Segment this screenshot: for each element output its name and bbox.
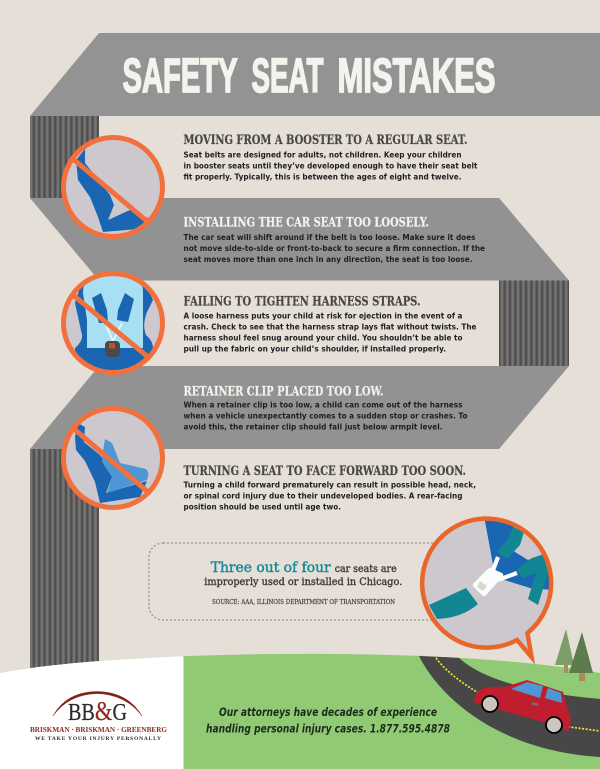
section 3 text: FAILING TO TIGHTEN HARNESS STRAPS. xyxy=(184,295,420,310)
hill: white logo area xyxy=(0,656,184,769)
logo: WE TAKE YOUR INJURY PERSONALLY xyxy=(35,736,161,742)
section 1 text xyxy=(184,133,478,182)
section 2 text: not move side-to-side or front-to-back to secure a firm connection. If the xyxy=(184,243,485,253)
tree: light xyxy=(555,629,574,673)
section 5 text: TURNING A SEAT TO FACE FORWARD TOO SOON. xyxy=(184,464,466,479)
section 2 text: INSTALLING THE CAR SEAT TOO LOOSELY. xyxy=(184,216,429,231)
striped fold: left top xyxy=(30,116,99,198)
section 2 text xyxy=(184,216,485,264)
icon: booster seat prohibited xyxy=(63,137,163,237)
statistic callout: car seats are xyxy=(335,564,397,575)
red car xyxy=(474,680,571,733)
striped fold: right xyxy=(499,280,569,366)
title: SAFETY xyxy=(122,50,238,103)
logo: BB&G xyxy=(68,696,127,726)
section 4 text: avoid this, the retainer clip should fall just below armpit level. xyxy=(184,421,442,431)
logo xyxy=(30,692,167,742)
section 3 text: A loose harness puts your child at risk for ejection in the event of a xyxy=(184,310,462,320)
hill: green xyxy=(0,654,600,769)
section 1 text: fit properly. Typically, this is between the ages of eight and twelve. xyxy=(184,172,462,182)
footer call to action xyxy=(206,705,450,736)
statistic callout: SOURCE: AAA, ILLINOIS DEPARTMENT OF TRANSPORTATION xyxy=(212,599,396,606)
band: retainer clip xyxy=(30,366,569,449)
section 5 text: or spinal cord injury due to their undeveloped bodies. A rear-facing xyxy=(184,490,463,500)
footer call to action: handling personal injury cases. 1.877.595.4878 xyxy=(206,722,450,736)
band: installing xyxy=(30,198,569,280)
road centre line xyxy=(434,655,600,731)
section 3 text: harness shoul feel snug around your child. You shouldn’t be able to xyxy=(184,332,463,342)
section 4 text: When a retainer clip is too low, a child can come out of the harness xyxy=(184,399,463,409)
car windows xyxy=(511,682,543,698)
section 3 text: crash. Check to see that the harness strap lays flat without twists. The xyxy=(184,321,477,331)
section 3 text xyxy=(184,295,477,353)
section 4 text: when a vehicle unexpectantly comes to a sudden stop or crashes. To xyxy=(184,410,468,420)
statistic callout: Three out of four xyxy=(211,560,331,576)
title banner xyxy=(30,33,600,116)
icon: forward-facing seat prohibited xyxy=(63,408,163,508)
section 5 text xyxy=(184,464,476,511)
footer call to action: Our attorneys have decades of experience xyxy=(219,705,437,719)
logo: BRISKMAN · BRISKMAN · GREENBERG xyxy=(30,725,167,734)
road xyxy=(418,650,600,757)
section 1 text: Seat belts are designed for adults, not children. Keep your children xyxy=(184,150,462,160)
section 2 text: seat moves more than one inch in any direction, the seat is too loose. xyxy=(184,254,472,264)
door handle xyxy=(532,702,538,706)
statistic callout xyxy=(149,543,479,620)
section 1 text: in booster seats until they’ve developed enough to have their seat belt xyxy=(184,160,478,170)
section 1 text: MOVING FROM A BOOSTER TO A REGULAR SEAT. xyxy=(184,133,468,148)
icon: harness straps prohibited xyxy=(63,273,163,380)
section 4 text xyxy=(184,385,468,431)
section 4 text: RETAINER CLIP PLACED TOO LOW. xyxy=(184,385,384,400)
section 3 text: pull up the fabric on your child’s shoulder, if installed properly. xyxy=(184,343,446,353)
title: SEAT xyxy=(252,50,324,103)
title: MISTAKES xyxy=(338,50,496,103)
section 5 text: position should be used until age two. xyxy=(184,501,341,511)
section 5 text: Turning a child forward prematurely can result in possible head, neck, xyxy=(184,479,476,489)
speech bubble: buckle closeup xyxy=(422,516,552,657)
wheels xyxy=(482,696,498,712)
tree: dark xyxy=(569,632,593,681)
striped fold: left bottom xyxy=(30,449,99,674)
statistic callout: improperly used or installed in Chicago. xyxy=(204,577,402,588)
section 2 text: The car seat will shift around if the belt is too loose. Make sure it does xyxy=(184,232,476,242)
